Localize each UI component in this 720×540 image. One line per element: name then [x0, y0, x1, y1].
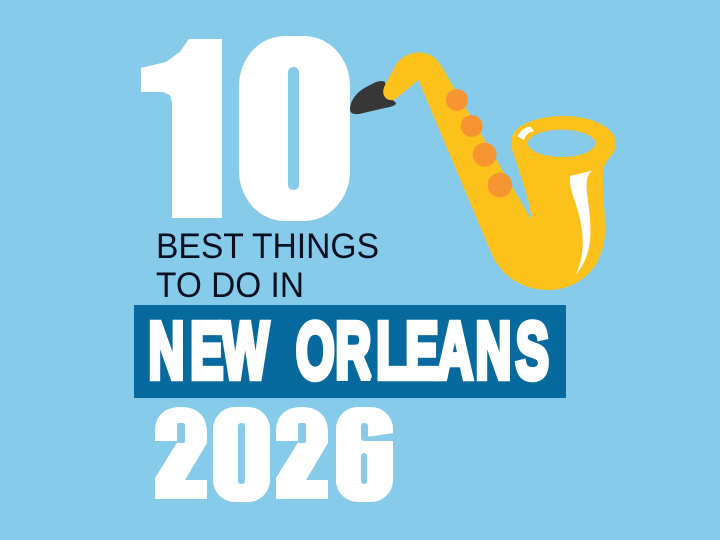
subtitle line 1: BEST THINGS	[156, 226, 379, 266]
icon: saxophone	[351, 53, 616, 290]
digit 1: 1	[99, 0, 259, 272]
year digit backing	[155, 407, 393, 502]
year text: 2026	[156, 399, 375, 520]
banner title: NEW ORLEANS	[148, 307, 549, 396]
year	[155, 407, 393, 502]
title number: 10	[141, 36, 350, 221]
subtitle line 2: TO DO IN	[156, 265, 304, 305]
digit 0: 0	[246, 12, 341, 250]
bell opening	[528, 130, 595, 157]
banner: New Orleans	[134, 305, 566, 398]
year digit counters	[177, 423, 394, 484]
saxophone body	[383, 53, 616, 290]
digit 1	[141, 39, 222, 218]
bell highlights	[517, 127, 592, 275]
keys	[446, 89, 512, 197]
mouthpiece	[351, 82, 395, 113]
